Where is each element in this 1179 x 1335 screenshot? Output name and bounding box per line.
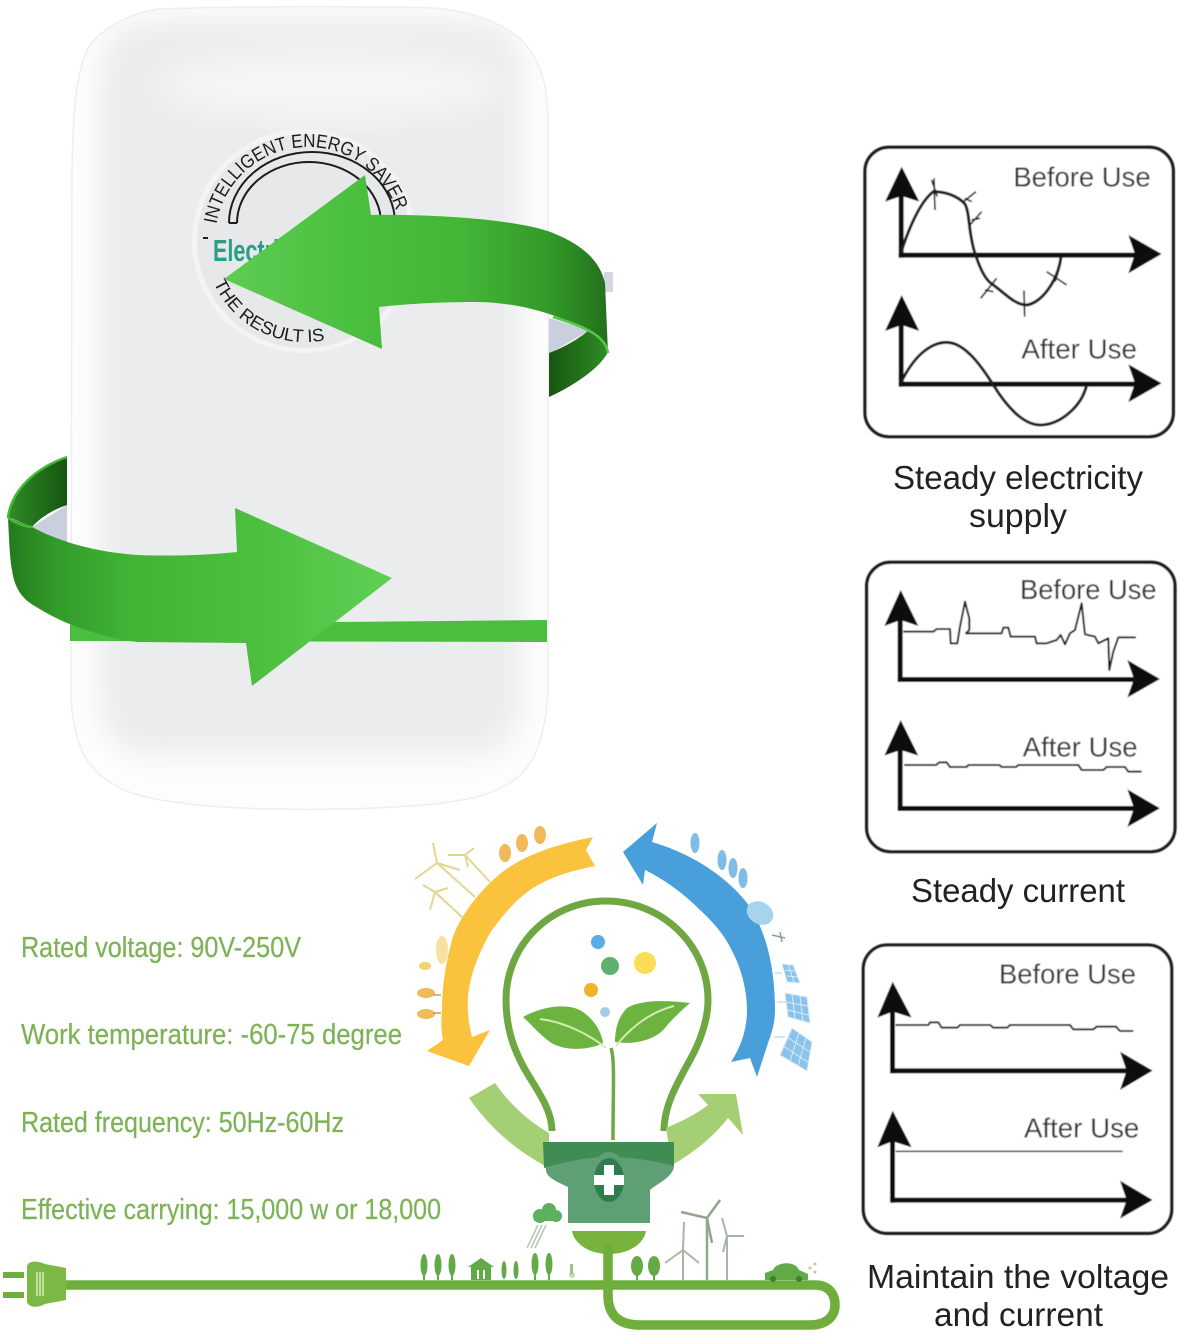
bottom band strip across device (70, 620, 547, 642)
arrow: light green left (469, 1083, 549, 1168)
grey inner shadow behind the right band (549, 318, 590, 354)
waveform: after (904, 762, 1142, 772)
axes: after (884, 720, 1160, 827)
bulb dots (584, 935, 656, 1017)
axes: after (885, 295, 1162, 402)
badge brand text: Electri (213, 233, 279, 268)
arrow: blue circular (623, 823, 775, 1077)
chart: steady electricity supply (865, 147, 1173, 437)
caption: steady electricity supply: supply (969, 497, 1068, 534)
waveform: before (901, 178, 1067, 317)
panel frame (863, 945, 1172, 1233)
grey inner shadow behind the left band (32, 505, 67, 546)
label: before use: Before Use (1020, 574, 1157, 605)
icon: plus (594, 1165, 624, 1195)
arrow: top wrap-around arrow (224, 175, 608, 397)
icons: yellow wind turbines (415, 843, 490, 918)
label: after use: After Use (1024, 1113, 1139, 1144)
cord (64, 1245, 835, 1325)
caption: steady electricity supply: Steady electricity (893, 459, 1143, 496)
badge arc ring (229, 152, 395, 223)
label: after use: After Use (1023, 732, 1138, 763)
arrow: light green right (666, 1094, 743, 1165)
bulb outline (506, 901, 708, 1131)
caption: maintain the voltage and current: Maintain the voltage (867, 1258, 1169, 1295)
label: after use: After Use (1021, 333, 1137, 364)
spec list: Effective carrying: 15,000 w or 18,000 (21, 1194, 441, 1226)
axes: before (884, 590, 1160, 698)
arrow: bottom wrap-around arrow (8, 457, 392, 686)
icon: power plug (3, 1262, 66, 1307)
illustration: green energy light bulb (3, 823, 835, 1325)
icons: blue trees (690, 833, 748, 888)
label: before use: Before Use (1013, 162, 1151, 193)
waveform: before (896, 1022, 1133, 1031)
panel frame (865, 147, 1173, 437)
caption: maintain the voltage and current (867, 1258, 1169, 1333)
icon: house (468, 1258, 494, 1280)
axes: before (877, 982, 1153, 1090)
icon: car (765, 1262, 816, 1282)
badge lower text: THE RESULT IS (216, 278, 324, 342)
waveform: after (896, 1149, 1123, 1154)
chart: maintain voltage and current (863, 945, 1172, 1233)
arrow: yellow circular (427, 837, 595, 1066)
panel: energy saver device (6, 6, 613, 810)
caption: steady electricity supply (893, 459, 1143, 534)
badge tick (203, 237, 208, 239)
icons: yellow trees (417, 826, 546, 1019)
axes: before (885, 167, 1162, 273)
spec list: Rated voltage: 90V-250V (21, 932, 301, 964)
icon: blue vehicle (742, 896, 785, 942)
plant sprout (523, 1001, 690, 1140)
spec list (21, 932, 441, 1226)
spec list: Rated frequency: 50Hz-60Hz (21, 1107, 344, 1139)
spec list: Work temperature: -60-75 degree (21, 1019, 402, 1051)
label: before use: Before Use (999, 958, 1136, 989)
icons: wind turbines (665, 1200, 744, 1280)
plug bowl (572, 1231, 646, 1254)
caption: steady current: Steady current (911, 872, 1125, 909)
badge title: INTELLIGENT ENERGY SAVER (204, 134, 407, 223)
caption: maintain the voltage and current: and current (934, 1296, 1103, 1333)
socket (543, 1142, 674, 1223)
icons: trees along cord (420, 1253, 660, 1280)
badge (203, 134, 407, 342)
icons: blue solar panels (774, 964, 812, 1071)
device body (71, 7, 548, 809)
panel frame (867, 562, 1175, 852)
waveform: before (903, 602, 1136, 670)
waveform: after (901, 342, 1087, 425)
grey side tab (604, 272, 613, 292)
axes: after (877, 1111, 1153, 1219)
chart: steady current (867, 562, 1175, 852)
icon: cloud and rain (527, 1203, 562, 1248)
